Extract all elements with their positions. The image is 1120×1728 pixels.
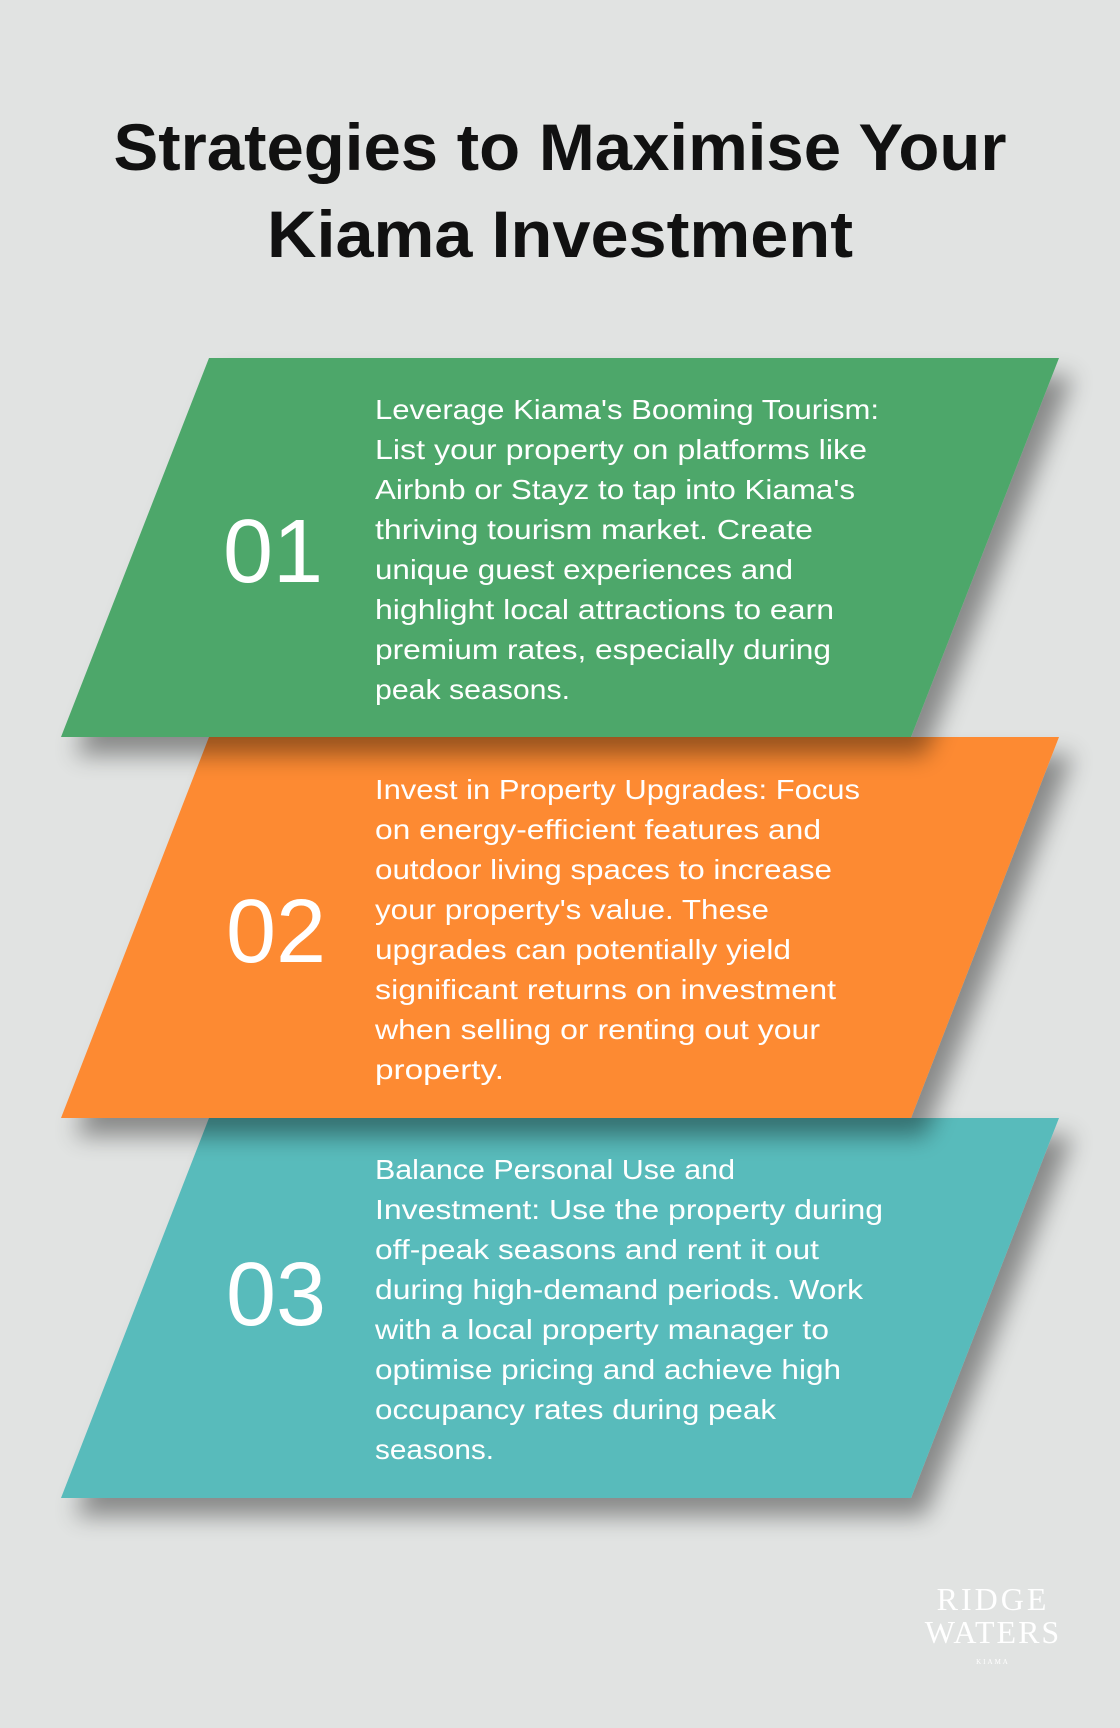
text block 01: Airbnb or Stayz to tap into Kiama's — [375, 474, 855, 505]
logo — [925, 1581, 1061, 1666]
title — [114, 110, 1006, 271]
text block 02: on energy-efficient features and — [375, 814, 821, 845]
panel: 03 — [61, 1118, 1059, 1498]
number 02: 02 — [226, 882, 326, 982]
logo: RIDGE — [937, 1581, 1049, 1617]
text block 01: unique guest experiences and — [375, 554, 793, 585]
text block 02: upgrades can potentially yield — [375, 934, 791, 965]
text block 03: Balance Personal Use and — [375, 1154, 735, 1185]
logo: KIAMA — [976, 1658, 1010, 1666]
text block 02: property. — [375, 1054, 504, 1085]
text block 03: off-peak seasons and rent it out — [375, 1234, 819, 1265]
text block 01: premium rates, especially during — [375, 634, 831, 665]
text block 01: peak seasons. — [375, 674, 570, 705]
panel: 02 — [61, 737, 1059, 1118]
number 01: 01 — [223, 502, 323, 602]
text block 03: Investment: Use the property during — [375, 1194, 883, 1225]
text block 02: significant returns on investment — [375, 974, 836, 1005]
text block 01: highlight local attractions to earn — [375, 594, 834, 625]
text block 01: List your property on platforms like — [375, 434, 867, 465]
text block 03: occupancy rates during peak — [375, 1394, 777, 1425]
panel: 01 — [61, 358, 1059, 737]
title: Strategies to Maximise Your — [114, 110, 1006, 184]
text block 03: optimise pricing and achieve high — [375, 1354, 841, 1385]
text block 03: with a local property manager to — [374, 1314, 829, 1345]
number 03: 03 — [226, 1245, 326, 1345]
text block 01: Leverage Kiama's Booming Tourism: — [375, 394, 879, 425]
text block 02: Invest in Property Upgrades: Focus — [375, 774, 860, 805]
text block 02 — [374, 774, 860, 1085]
title: Kiama Investment — [267, 197, 853, 271]
text block 02: outdoor living spaces to increase — [375, 854, 832, 885]
text block 01 — [375, 394, 879, 705]
text block 02: your property's value. These — [375, 894, 769, 925]
text block 01: thriving tourism market. Create — [375, 514, 813, 545]
text block 03 — [374, 1154, 883, 1465]
text block 02: when selling or renting out your — [374, 1014, 820, 1045]
text block 03: seasons. — [375, 1434, 494, 1465]
logo: WATERS — [925, 1614, 1061, 1650]
text block 03: during high-demand periods. Work — [375, 1274, 864, 1305]
